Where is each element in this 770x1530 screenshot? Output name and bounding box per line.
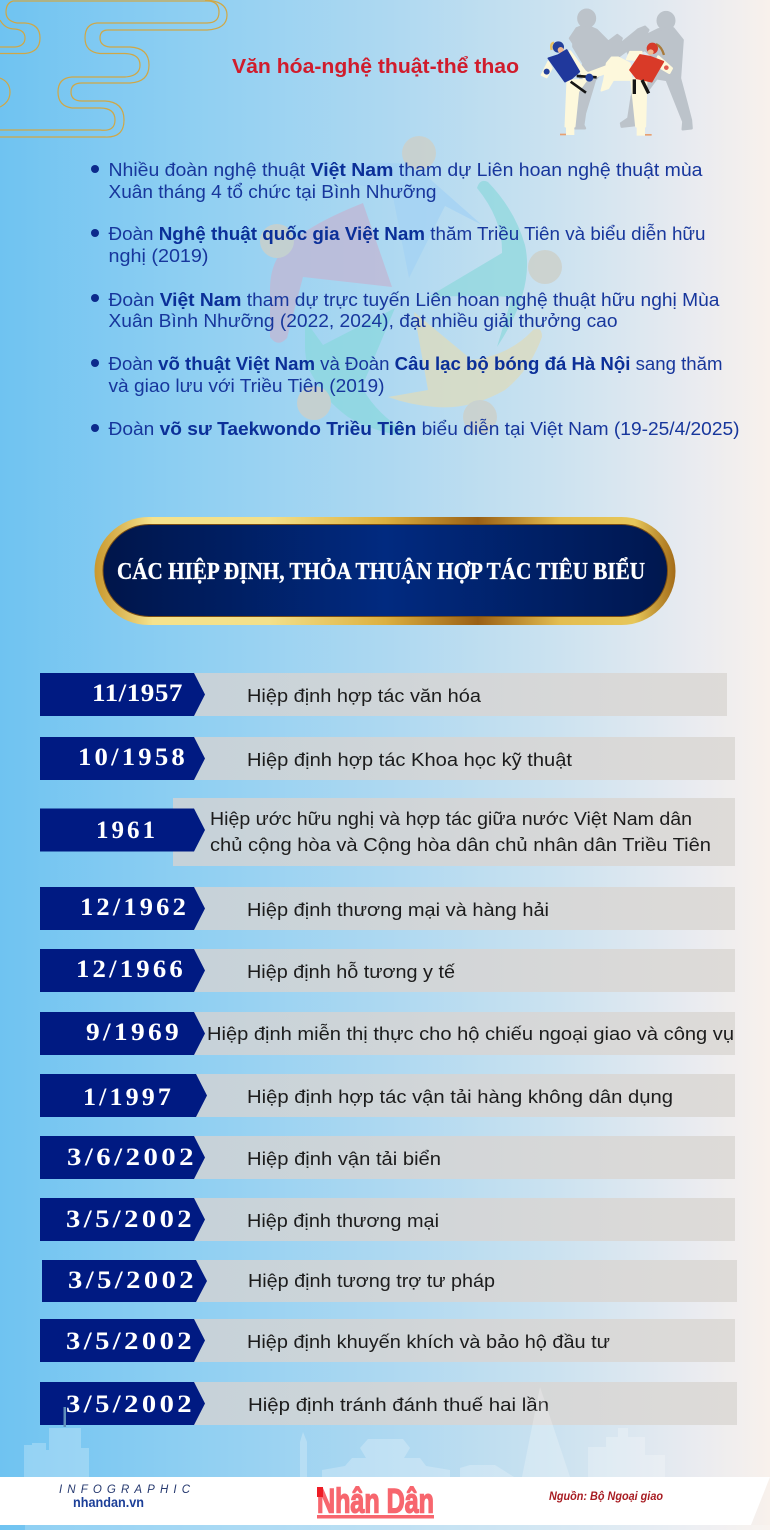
row 1961: Hiệp ước hữu nghị và hợp tác giữa nước Việt Nam dân [210, 808, 692, 829]
heads [260, 136, 562, 434]
row 3/5/2002 a [40, 1198, 735, 1241]
footer strip [25, 1525, 770, 1530]
footer band [0, 1477, 770, 1525]
row 12/1966 [40, 949, 735, 992]
row 3/6/2002: 3/6/2002 [67, 1144, 197, 1171]
row 3/5/2002 c [40, 1319, 735, 1362]
row 12/1962 [40, 887, 735, 930]
footer: website: nhandan.vn [73, 1495, 144, 1510]
row 10/1958: Hiệp định hợp tác Khoa học kỹ thuật [247, 749, 572, 770]
bullet 4: và giao lưu với Triều Tiên (2019) [108, 375, 384, 396]
row 1961: 1961 [96, 817, 158, 844]
row 3/6/2002 [40, 1136, 735, 1179]
bullet 2: nghị (2019) [108, 245, 208, 266]
row 3/5/2002 a: Hiệp định thương mại [247, 1210, 439, 1231]
row 12/1966: Hiệp định hỗ tương y tế [247, 961, 456, 982]
bullet 2: Đoàn Nghệ thuật quốc gia Việt Nam thăm Triều Tiên và biểu diễn hữu [108, 223, 706, 244]
row 3/6/2002: Hiệp định vận tải biển [247, 1148, 441, 1169]
bullet 2 [91, 223, 706, 266]
row 3/5/2002 c: Hiệp định khuyến khích và bảo hộ đầu tư [247, 1331, 610, 1352]
row 10/1958: 10/1958 [78, 744, 188, 771]
row 3/5/2002 c: 3/5/2002 [66, 1328, 195, 1355]
row 11/1957: 11/1957 [92, 680, 183, 707]
row 3/5/2002 a: 3/5/2002 [66, 1206, 195, 1233]
red fighter [627, 43, 672, 136]
row 3/5/2002 b [42, 1260, 737, 1302]
row 3/5/2002 b: Hiệp định tương trợ tư pháp [248, 1270, 495, 1291]
footer: infographic label: INFOGRAPHIC [59, 1484, 191, 1496]
figure: purple [270, 203, 392, 343]
row 3/5/2002 d: Hiệp định tránh đánh thuế hai lần [248, 1394, 549, 1415]
figure: blue [319, 163, 482, 278]
bullet 4: Đoàn võ thuật Việt Nam và Đoàn Câu lạc bộ bóng đá Hà Nội sang thăm [108, 353, 722, 374]
row 10/1958 [40, 737, 735, 780]
row 1961: chủ cộng hòa và Cộng hòa dân chủ nhân dân Triều Tiên [210, 834, 711, 855]
bullet 3 [91, 289, 720, 331]
row 1/1997 [40, 1074, 735, 1117]
watermark: five-figure circle logo [260, 136, 562, 435]
red fighter kicking leg [601, 57, 632, 91]
row 12/1962: 12/1962 [80, 894, 189, 921]
row 3/5/2002 d: 3/5/2002 [66, 1391, 195, 1418]
row 11/1957 [40, 673, 727, 716]
section heading: Văn hóa-nghệ thuật-thể thao [232, 55, 519, 78]
figure: teal right [428, 181, 527, 347]
row 9/1969 [40, 1012, 735, 1055]
agreements timeline [40, 673, 737, 1425]
bullet 1 [91, 159, 703, 202]
grey silhouettes [570, 10, 692, 129]
bullet 1: Nhiều đoàn nghệ thuật Việt Nam tham dự Liên hoan nghệ thuật mùa [108, 159, 703, 180]
bullet 1: Xuân tháng 4 tổ chức tại Bình Nhưỡng [108, 181, 436, 202]
bullet list [91, 159, 740, 439]
decorative gold curves [0, 0, 227, 137]
figure: teal bottom [305, 308, 403, 435]
row 1961 [40, 798, 735, 866]
row 12/1966: 12/1966 [76, 956, 186, 983]
bullet 5: Đoàn võ sư Taekwondo Triều Tiên biểu diễn tại Việt Nam (19-25/4/2025) [108, 418, 740, 439]
row 3/5/2002 d [40, 1382, 737, 1425]
banner: agreements title: CÁC HIỆP ĐỊNH, THỎA THUẬN HỢP TÁC TIÊU BIỂU [117, 558, 645, 585]
blue fighter [542, 41, 597, 135]
row 9/1969: 9/1969 [86, 1019, 182, 1046]
skyline silhouette [24, 1387, 665, 1477]
bullet 3: Xuân Bình Nhưỡng (2022, 2024), đạt nhiều giải thưởng cao [108, 310, 618, 331]
illustration: taekwondo fighters [542, 10, 692, 136]
row 3/5/2002 b: 3/5/2002 [68, 1267, 197, 1294]
row 9/1969: Hiệp định miễn thị thực cho hộ chiếu ngoại giao và công vụ [207, 1023, 734, 1044]
banner: agreements title [94, 517, 676, 625]
row 11/1957: Hiệp định hợp tác văn hóa [247, 685, 482, 706]
figure: yellow [388, 312, 542, 407]
row 1/1997: Hiệp định hợp tác vận tải hàng không dân dụng [247, 1086, 673, 1107]
row 1/1997: 1/1997 [83, 1084, 174, 1111]
bullet 4 [91, 353, 722, 396]
bullet 3: Đoàn Việt Nam tham dự trực tuyến Liên hoan nghệ thuật hữu nghị Mùa [108, 289, 720, 310]
row 12/1962: Hiệp định thương mại và hàng hải [247, 899, 549, 920]
footer: Nhân Dân logo: Nhân Dân [317, 1482, 434, 1520]
footer: source: Nguồn: Bộ Ngoại giao [549, 1491, 663, 1503]
